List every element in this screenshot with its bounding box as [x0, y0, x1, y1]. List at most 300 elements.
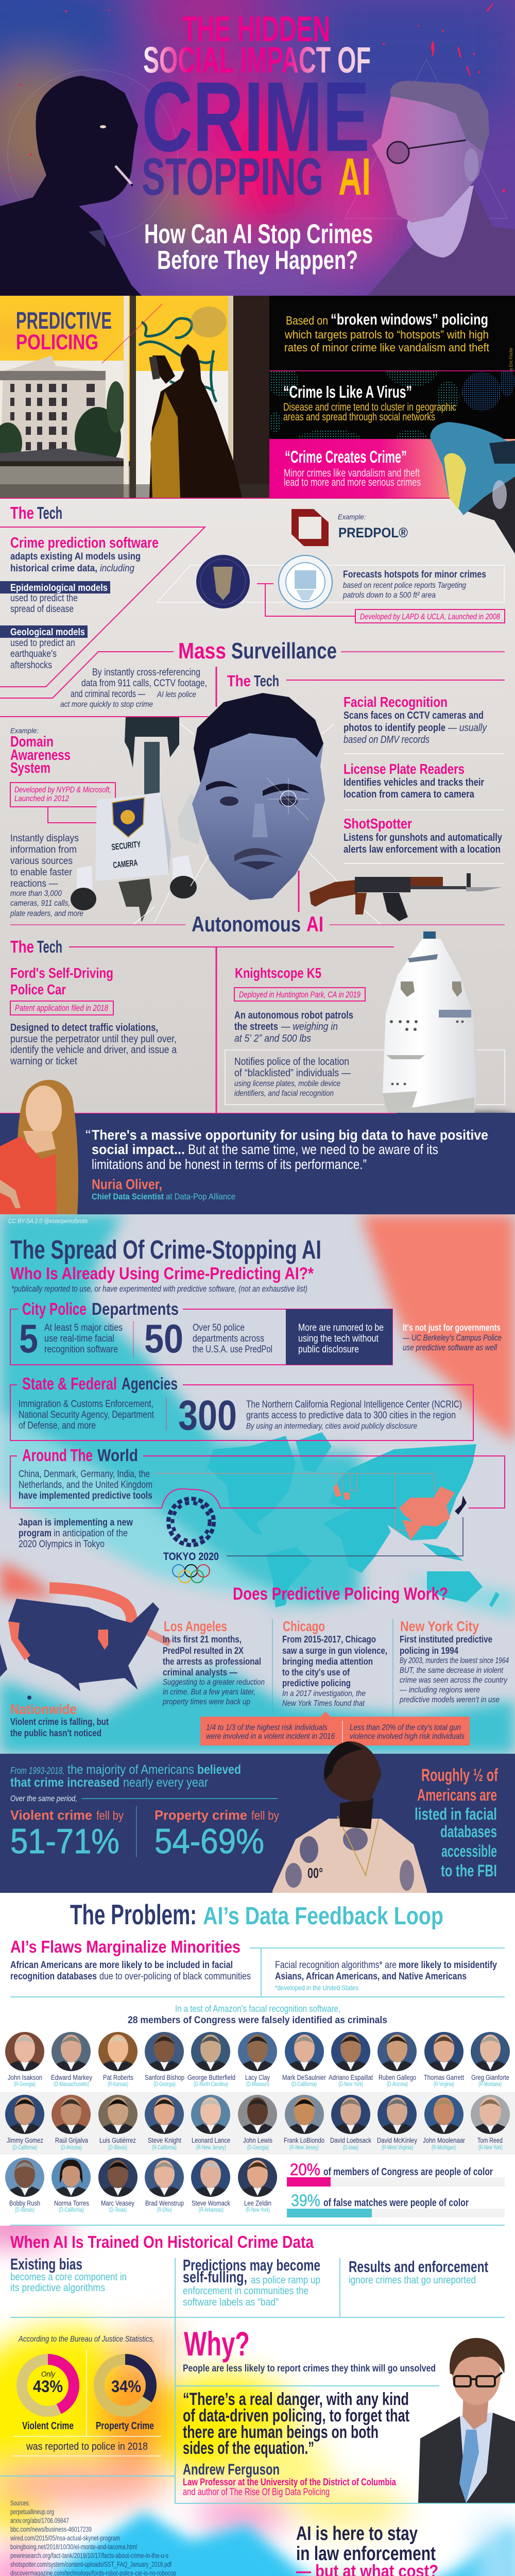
- column: new york city: New York City: [400, 1618, 479, 1634]
- panel: when ai is trained on historical crime data: becomes a core component in: [10, 2272, 127, 2283]
- panel: quote nuria oliver: “: [85, 1127, 91, 1143]
- panel: around the world: World: [97, 1446, 138, 1465]
- heading: the tech 3: Tech: [37, 937, 62, 956]
- text block: amazon test: In a test of Amazon’s facial recognition software,: [175, 2004, 340, 2014]
- column: new york city: predictive models weren't in use: [399, 1696, 500, 1704]
- panel: around the world: have implemented predictive tools: [19, 1490, 152, 1501]
- portrait: raul grijalva: [52, 2095, 91, 2151]
- quote: andrew ferguson: “There’s a real danger, with any kind: [183, 2389, 409, 2409]
- hero banner: [0, 0, 515, 304]
- callout: not just governments: [402, 1323, 502, 1352]
- panel: domain awareness system: [10, 726, 115, 918]
- text block: half of americans: [415, 1766, 498, 1880]
- panel: quote nuria oliver: [0, 1080, 515, 1214]
- text block: sources: pewresearch.org/fact-tank/2019/10/17/facts-about-crime-in-the-u-s: [10, 2551, 168, 2560]
- portrait: norma torres: [52, 2158, 91, 2213]
- panel: crime creates crime: “Crime Creates Crime”: [285, 447, 407, 466]
- panel: public perception of crime: fell by: [251, 1809, 279, 1823]
- heading: the tech: [10, 503, 62, 522]
- panel: tech list facial recognition plate shotspotter: photos to identify people: [344, 722, 445, 734]
- panel: crime is like a virus: Disease and crime tend to cluster in geographic: [283, 401, 456, 413]
- bar chart: people of color: 39%: [291, 2191, 320, 2210]
- panel: crime is like a virus: [269, 370, 515, 439]
- heading: the problem: [70, 1899, 443, 1930]
- portrait: john lewis: (D-Georgia): [247, 2145, 269, 2151]
- panel: ford self-driving police car: Ford's Self-Driving: [10, 965, 113, 981]
- heading: the tech 2: Tech: [254, 672, 279, 690]
- panel: state and federal agencies: [10, 1374, 473, 1440]
- title: STOPPING: [142, 147, 323, 206]
- panel: city police departments: Departments: [92, 1299, 179, 1318]
- panel: domain awareness system: Example:: [10, 726, 39, 735]
- panel: tech list facial recognition plate shotspotter: Identifies vehicles and tracks their: [344, 777, 484, 788]
- column: chicago: predictive policing: [282, 1678, 351, 1688]
- portrait: marc veasey: Marc Veasey: [101, 2199, 134, 2207]
- donut: property crime: [96, 2360, 154, 2432]
- panel: ford self-driving police car: Designed to detect traffic violations,: [10, 1022, 158, 1033]
- title: AI: [338, 147, 371, 206]
- panel: quote nuria oliver: social impact...: [92, 1142, 185, 1157]
- heading: spread: [10, 1235, 321, 1294]
- column: los angeles: PredPol resulted in 2X: [163, 1646, 244, 1656]
- panel: ai's flaws marginalize minorities: Facial recognition algorithms* are: [275, 1960, 397, 1971]
- text block: sources: [10, 2499, 467, 2576]
- portrait: greg gianforte: [471, 2032, 510, 2088]
- column: los angeles: [162, 1618, 265, 1706]
- heading: the tech 2: [227, 672, 505, 690]
- portrait: frank lobiondo: (R-New Jersey): [289, 2145, 319, 2151]
- panel: when ai is trained on historical crime data: [0, 2225, 515, 2503]
- panel: city police departments: using the tech without: [298, 1333, 379, 1344]
- text block: cross-referencing: By instantly cross-referencing: [92, 667, 200, 678]
- panel: knightscope k5: identifiers, and facial recognition: [234, 1089, 334, 1098]
- portrait: brad wenstrup: Brad Wenstrup: [145, 2199, 184, 2207]
- title: SOCIAL IMPACT OF: [143, 40, 371, 81]
- portrait: brad wenstrup: (R-Ohio): [157, 2207, 172, 2213]
- photo: scanned face: [133, 693, 381, 925]
- text block: japan: program: [19, 1528, 52, 1539]
- panel: ford self-driving police car: Patent application filed in 2018: [15, 1003, 108, 1013]
- photo: knightscope robot: [383, 931, 515, 1122]
- portrait: tom reed: [471, 2095, 510, 2151]
- column: chicago: New York Times found that: [282, 1699, 365, 1708]
- portrait: marc veasey: (D-Texas): [109, 2207, 127, 2213]
- panel: when ai is trained on historical crime data: Existing bias: [10, 2255, 82, 2273]
- panel: when ai is trained on historical crime data: self-fulling,: [183, 2268, 247, 2286]
- text block: japan: in anticipation of the: [54, 1528, 128, 1539]
- panel: knightscope k5: — weighing in: [281, 1021, 338, 1032]
- panel: ford self-driving police car: pursue the perpetrator until they pull over,: [10, 1033, 177, 1045]
- panel: ford self-driving police car: [10, 965, 177, 1067]
- bar chart: people of color: 20%: [290, 2160, 320, 2179]
- graffiti tag: [139, 318, 216, 402]
- text: predictive policing: POLICING: [16, 330, 98, 354]
- chart: crime reporting donuts: was reported to police in 2018: [26, 2441, 148, 2452]
- heading: the tech 3: [10, 937, 394, 1113]
- portrait: pat roberts: Pat Roberts: [103, 2074, 133, 2081]
- panel: crime prediction software: used to predict the: [10, 593, 78, 604]
- panel: broken windows: CC BY-SA 2.0 Some rights reserved by Eric Fische: [508, 348, 513, 435]
- panel: domain awareness system: Launched in 2012: [14, 794, 69, 803]
- column: chicago: saw a surge in gun violence,: [282, 1646, 387, 1656]
- portrait: lee zeldin: (R-New York): [246, 2207, 270, 2213]
- portrait: tom reed: Tom Reed: [477, 2137, 503, 2144]
- bar chart: people of color: [287, 2160, 505, 2217]
- panel: spread of crime-stopping ai: [0, 1214, 515, 1754]
- portrait: edward markey: Edward Markey: [51, 2074, 92, 2081]
- panel: tech list facial recognition plate shotspotter: — usually: [448, 722, 487, 734]
- portrait: pat roberts: [98, 2032, 138, 2088]
- heading: mass surveillance: [178, 638, 505, 664]
- heading: the tech: Tech: [37, 503, 62, 522]
- panel: quote nuria oliver: limitations and be honest in terms of its performance.”: [92, 1157, 367, 1172]
- panel: crime is like a virus: “Crime Is Like A Virus”: [283, 382, 412, 401]
- portrait: john moolenaar: (R-Michigan): [432, 2145, 456, 2151]
- panel: tech list facial recognition plate shotspotter: location from camera to camera: [344, 789, 475, 800]
- panel: public perception of crime: fell by: [96, 1809, 124, 1823]
- portrait: john isakson: John Isakson: [8, 2074, 42, 2081]
- bar chart: people of color: of false matches were people of color: [323, 2197, 469, 2209]
- text block: sources: bbc.com/news/business-46017239: [10, 2525, 92, 2533]
- text block: sources: boingboing.net/2018/10/30/el-monte-and-tacoma.html: [10, 2543, 137, 2551]
- chart: crime reporting donuts: According to the Bureau of Justice Statistics,: [18, 2335, 154, 2344]
- panel: ai's flaws marginalize minorities: more likely to misidentify: [399, 1960, 497, 1971]
- portrait: bobby rush: (D-Illinois): [15, 2207, 35, 2213]
- panel: broken windows: Based on: [286, 314, 328, 327]
- heading: the problem: AI’s Data Feedback Loop: [203, 1903, 443, 1930]
- panel: when ai is trained on historical crime data: its predictive algorithms: [10, 2282, 105, 2294]
- panel: crime creates crime: [269, 439, 515, 498]
- panel: city police departments: 5: [19, 1316, 38, 1361]
- photo: nypd security camera: SECURITY: [111, 839, 142, 852]
- panel: city police departments: More are rumored to be: [298, 1323, 384, 1333]
- panel: ford self-driving police car: warning or ticket: [10, 1056, 77, 1067]
- text block: sources: arxiv.org/abs/1706.09847: [10, 2516, 69, 2524]
- photo: apartment building: [0, 355, 135, 498]
- portrait: john isakson: [5, 2032, 44, 2088]
- portrait: steve womack: [191, 2158, 230, 2213]
- panel: ai's flaws marginalize minorities: African Americans are more likely to be included in facial: [10, 1960, 233, 1971]
- title: CRIME: [142, 61, 370, 172]
- portrait: raul grijalva: (D-Arizona): [61, 2145, 82, 2151]
- text block: cross-referencing: act more quickly to stop crime: [60, 700, 153, 709]
- portrait: john isakson: (R-Georgia): [14, 2081, 36, 2088]
- column: new york city: First instituted predictive: [400, 1634, 492, 1645]
- portrait: luis gutierrez: (D-Illinois): [108, 2145, 127, 2151]
- callout: chicago findings: were involved in a violent incident in 2016: [206, 1732, 335, 1741]
- text block: nationwide: the public hasn't noticed: [10, 1728, 101, 1738]
- portrait: pat roberts: (R-Kansas): [108, 2081, 128, 2088]
- portrait: norma torres: Norma Torres: [54, 2199, 89, 2207]
- heading: the problem: The Problem:: [70, 1899, 197, 1930]
- portrait: raul grijalva: Raúl Grijalva: [55, 2137, 88, 2144]
- column: los angeles: in crime. But a few years later,: [163, 1688, 255, 1697]
- portrait: david loebsack: [330, 2095, 371, 2151]
- text block: cross-referencing: data from 911 calls, CCTV footage,: [81, 678, 207, 689]
- column: los angeles: property times were back up: [162, 1698, 250, 1706]
- panel: quote nuria oliver: at Data-Pop Alliance: [166, 1192, 235, 1201]
- panel: tech list facial recognition plate shotspotter: Scans faces on CCTV cameras and: [344, 710, 484, 721]
- callout: chicago findings: 1/4 to 1/3 of the highest risk individuals: [206, 1723, 328, 1732]
- panel: around the world: [10, 1446, 505, 1508]
- portrait: jimmy gomez: [5, 2095, 44, 2151]
- text block: japan: Japan is implementing a new: [19, 1517, 133, 1528]
- panel: the tech and mass surveillance background: [0, 498, 515, 1113]
- icon: spray can and hand: [431, 422, 515, 554]
- panel: when ai is trained on historical crime data: software labels as “bad”: [183, 2297, 279, 2308]
- panel: crime prediction software: [0, 527, 205, 698]
- closing statement: [296, 2523, 438, 2576]
- logo: predpol: PREDPOL®: [338, 525, 408, 540]
- panel: crime prediction software: Crime prediction software: [10, 535, 159, 551]
- panel: public perception of crime: Violent crime: [10, 1807, 92, 1823]
- portrait: frank lobiondo: [284, 2095, 324, 2151]
- column: los angeles: criminal analysts —: [163, 1667, 237, 1677]
- callout: developed by lapd and ucla: [257, 584, 505, 623]
- portrait: john lewis: [238, 2095, 277, 2151]
- panel: broken windows: rates of minor crime like vandalism and theft: [284, 341, 489, 354]
- column: new york city: [399, 1618, 509, 1704]
- callout: chicago findings: Less than 20% of the city's total gun: [350, 1723, 461, 1732]
- heading: spread: Who Is Already Using Crime-Predicting AI?*: [10, 1264, 314, 1283]
- panel: knightscope k5: the streets: [234, 1021, 278, 1032]
- donut: violent crime: [22, 2360, 74, 2432]
- icon: assault rifle: [299, 871, 502, 921]
- panel: public perception of crime: believed: [197, 1762, 241, 1777]
- panel: crime prediction software: used to predict an: [10, 638, 75, 649]
- panel: city police departments: Over 50 police: [193, 1323, 245, 1333]
- closing statement: in law enforcement: [296, 2543, 436, 2565]
- portrait: steve knight: [145, 2095, 184, 2151]
- panel: ai's flaws marginalize minorities: due to over-policing of black communities: [99, 1971, 251, 1982]
- panel: spread of crime-stopping ai: CC BY-SA 2.0 @esterperezbroto: [8, 1217, 88, 1225]
- text block: nationwide: [10, 1701, 109, 1738]
- donut: property crime: Property Crime: [96, 2420, 154, 2432]
- silhouette: graffiti artist: [149, 344, 242, 498]
- panel: why: Why?: [184, 2325, 250, 2363]
- column: chicago: to the city's use of: [282, 1667, 350, 1677]
- portrait: jimmy gomez: (D-California): [12, 2145, 37, 2151]
- panel: ai's flaws marginalize minorities: AI’s Flaws Marginalize Minorities: [10, 1937, 241, 1956]
- panel: around the world: Netherlands, and the United Kingdom: [19, 1480, 152, 1490]
- column: los angeles: Los Angeles: [164, 1618, 227, 1634]
- photo: nypd security camera: CAMERA: [112, 858, 138, 870]
- donut: property crime: 34%: [111, 2377, 141, 2396]
- panel: public perception of crime: [0, 1741, 515, 1893]
- text block: sources: shotspotter.com/system/content-uploads/SST_FAQ_January_2018.pdf: [10, 2560, 171, 2568]
- portrait: mark desaulnier: Mark DeSaulnier: [282, 2074, 326, 2081]
- panel: quote nuria oliver: Chief Data Scientist: [92, 1192, 164, 1201]
- panel: domain awareness system: cameras, 911 calls,: [10, 899, 70, 908]
- panel: knightscope k5: at 5' 2” and 500 lbs: [234, 1033, 311, 1044]
- panel: state and federal agencies: By using an intermediary, cities avoid publicly disclosure: [246, 1422, 417, 1431]
- panel: why: People are less likely to report crimes they think will go unsolved: [183, 2363, 436, 2374]
- label: geological models: Geological models: [10, 627, 85, 638]
- portrait: george butterfield: [187, 2032, 235, 2088]
- panel: knightscope k5: [225, 965, 505, 1105]
- portrait: lee zeldin: [238, 2158, 277, 2213]
- portrait: mark desaulnier: (D-California): [291, 2081, 317, 2088]
- portrait: thomas garrett: [424, 2032, 464, 2088]
- heading: the tech 3: The: [10, 937, 34, 956]
- title: THE HIDDEN: [182, 9, 330, 49]
- callout: forecasts hotspots: based on recent police reports Targeting: [343, 581, 466, 590]
- portrait: adriano espaillat: [329, 2032, 373, 2088]
- panel: knightscope k5: of “blacklisted” individuals —: [234, 1067, 351, 1079]
- panel: quote nuria oliver: There's a massive opportunity for using big data to have positive: [92, 1127, 488, 1143]
- portrait: thomas garrett: Thomas Garrett: [424, 2074, 464, 2081]
- panel: city police departments: departments across: [193, 1333, 264, 1344]
- chart: crime reporting donuts: [13, 2335, 161, 2456]
- panel: predictive policing photo: [0, 296, 269, 498]
- portrait: david loebsack: (D-Iowa): [343, 2145, 358, 2151]
- heading: autonomous ai: Autonomous: [192, 912, 301, 936]
- quote: andrew ferguson: Law Professor at the University of the District of Columbia: [183, 2477, 396, 2488]
- callout: forecasts hotspots: [157, 565, 504, 602]
- panel: public perception of crime: From 1993-2018,: [10, 1766, 64, 1776]
- portrait: lee zeldin: Lee Zeldin: [244, 2199, 271, 2207]
- panel: public perception of crime: 54-69%: [154, 1822, 264, 1861]
- portrait: edward markey: (D-Massachusetts): [54, 2081, 89, 2088]
- callout: chicago findings: violence involved high risk individuals: [350, 1732, 465, 1741]
- portrait: steve womack: Steve Womack: [192, 2199, 230, 2207]
- text: predictive policing: PREDICTIVE: [16, 307, 112, 334]
- panel: knightscope k5: Knightscope K5: [235, 965, 321, 981]
- panel: when ai is trained on historical crime data: enforcement in communities the: [183, 2285, 308, 2297]
- panel: crime prediction software: spread of disease: [10, 604, 74, 615]
- heading: spread: The Spread Of Crime-Stopping AI: [10, 1235, 321, 1264]
- text block: sources: wired.com/2015/05/nsa-actual-skynet-program: [10, 2534, 120, 2542]
- panel: state and federal agencies: National Security Agency, Department: [19, 1410, 154, 1420]
- label: epidemiological models: Epidemiological models: [10, 583, 108, 594]
- portrait: greg gianforte: (R-Montana): [478, 2081, 502, 2088]
- portrait: marc veasey: [98, 2158, 138, 2213]
- title: [143, 16, 370, 195]
- photo: nypd security camera: [71, 717, 204, 922]
- panel: public perception of crime: the majority of Americans: [67, 1762, 194, 1777]
- text block: cross-referencing: and criminal records —: [71, 689, 145, 700]
- panel: lower gradient background: [0, 2213, 515, 2576]
- panel: ai's flaws marginalize minorities: recognition databases: [10, 1971, 97, 1982]
- callout: forecasts hotspots: Forecasts hotspots for minor crimes: [343, 569, 486, 580]
- logo: tokyo 2020: [163, 1499, 219, 1583]
- panel: domain awareness system: Developed by NYPD & Microsoft,: [14, 786, 111, 794]
- panel: ai's flaws marginalize minorities: *developed in the United States: [275, 1984, 358, 1992]
- panel: ai's flaws marginalize minorities: [10, 1937, 505, 1997]
- column: los angeles: the arrests as professional: [163, 1656, 261, 1667]
- column: new york city: — including regions were: [399, 1686, 480, 1694]
- panel: tech list facial recognition plate shotspotter: [344, 694, 505, 863]
- portrait: adriano espaillat: Adriano Espaillat: [329, 2074, 373, 2081]
- text block: nationwide: Nationwide: [10, 1701, 77, 1717]
- portrait: edward markey: [51, 2032, 92, 2088]
- panel: public perception of crime: Property crime: [154, 1807, 247, 1823]
- panel: crime prediction software: earthquake's: [10, 649, 57, 659]
- panel: crime prediction software: aftershocks: [10, 660, 52, 671]
- column: los angeles: Suggesting to a greater reduction: [163, 1678, 265, 1687]
- photo: man with glasses: [368, 81, 515, 296]
- text block: half of americans: to the FBI: [441, 1861, 497, 1880]
- portrait: leonard lance: [191, 2095, 230, 2151]
- text block: sources: perpetuallineup.org: [10, 2507, 54, 2516]
- photo: andrew ferguson: [418, 2338, 515, 2503]
- heading: mass surveillance: Mass: [178, 638, 226, 664]
- portrait: david mckinley: (R-West Virginia): [382, 2145, 413, 2151]
- donut: violent crime: Only: [41, 2370, 56, 2379]
- portrait: luis gutierrez: Luis Gutiérrez: [99, 2137, 136, 2144]
- portrait: david loebsack: David Loebsack: [330, 2137, 371, 2144]
- panel: crime prediction software: adapts existing AI models using: [10, 551, 141, 562]
- panel: quote nuria oliver: But at the same time, we need to be aware of its: [188, 1142, 438, 1157]
- panel: domain awareness system: reactions —: [10, 878, 58, 889]
- panel: public perception of crime: 51-71%: [10, 1822, 119, 1861]
- portrait: mark desaulnier: [282, 2032, 326, 2088]
- portrait: tom reed: (R-New York): [478, 2145, 503, 2151]
- panel: crime prediction software: including: [100, 563, 134, 574]
- heading: does predictive policing work: Does Predictive Policing Work?: [233, 1584, 448, 1604]
- quote: andrew ferguson: sides of the equation.”: [183, 2438, 314, 2458]
- portrait: lacy clay: Lacy Clay: [245, 2074, 270, 2081]
- portrait: david mckinley: David McKinley: [377, 2137, 417, 2144]
- panel: public perception of crime: that crime increased: [10, 1775, 119, 1790]
- panel: knightscope k5: Deployed in Huntington Park, CA in 2019: [239, 990, 360, 999]
- photo: young man: [272, 1741, 427, 1893]
- icon: lapd seal: [196, 555, 250, 608]
- panel: tech list facial recognition plate shotspotter: Facial Recognition: [344, 694, 448, 710]
- subtitle: [144, 219, 373, 275]
- portrait: lacy clay: (D-Missouri): [246, 2081, 269, 2088]
- panel: domain awareness system: more than 3,000: [10, 889, 62, 898]
- text block: nationwide: Violent crime is falling, but: [10, 1717, 109, 1727]
- icon: ucla seal: [279, 555, 332, 609]
- panel: crime creates crime: Minor crimes like vandalism and theft: [284, 467, 420, 479]
- panel: domain awareness system: Awareness: [10, 747, 71, 764]
- portrait: jimmy gomez: Jimmy Gomez: [7, 2137, 43, 2144]
- panel: public perception of crime: nearly every year: [123, 1775, 208, 1790]
- subtitle: Before They Happen?: [157, 245, 358, 275]
- portrait: leonard lance: (R-New Jersey): [196, 2145, 226, 2151]
- portrait: sanford bishop: Sanford Bishop: [145, 2074, 184, 2081]
- logo: tokyo 2020: TOKYO 2020: [163, 1551, 219, 1563]
- panel: state and federal agencies: Immigration & Customs Enforcement,: [19, 1399, 153, 1410]
- portrait: sanford bishop: [145, 2032, 184, 2088]
- quote: andrew ferguson: there are human beings on both: [183, 2422, 379, 2442]
- panel: city police departments: the U.S.A. use PredPol: [193, 1344, 272, 1355]
- portrait: john moolenaar: [423, 2095, 465, 2151]
- callout: chicago findings: [200, 1711, 470, 1745]
- panel: city police departments: [10, 1299, 392, 1365]
- text block: cross-referencing: AI lets police: [157, 690, 196, 699]
- column: chicago: Chicago: [283, 1618, 325, 1634]
- photo: nuria oliver: [0, 1080, 78, 1214]
- quote: andrew ferguson: and author of The Rise Of Big Data Policing: [183, 2487, 330, 2498]
- panel: knightscope k5: An autonomous robot patrols: [234, 1010, 353, 1021]
- panel: city police departments: At least 5 major cities: [44, 1323, 123, 1333]
- panel: broken windows: [269, 296, 515, 435]
- panel: state and federal agencies: of Defense, and more: [19, 1420, 96, 1431]
- text: predictive policing: [17, 312, 111, 349]
- portrait: luis gutierrez: [98, 2095, 138, 2151]
- quote: andrew ferguson: Andrew Ferguson: [183, 2461, 280, 2478]
- panel: crime prediction software: historical crime data,: [10, 563, 97, 574]
- panel: state and federal agencies: grants access to predictive data to 300 cities in the region: [246, 1410, 456, 1421]
- panel: tech list facial recognition plate shotspotter: based on DMV records: [344, 734, 430, 745]
- text block: cross-referencing: [0, 667, 216, 717]
- panel: domain awareness system: to enable faster: [10, 867, 73, 878]
- column: chicago: From 2015-2017, Chicago: [282, 1634, 376, 1645]
- quote: andrew ferguson: of data-driven policing, to forget that: [183, 2406, 409, 2426]
- portrait: david mckinley: [377, 2095, 417, 2151]
